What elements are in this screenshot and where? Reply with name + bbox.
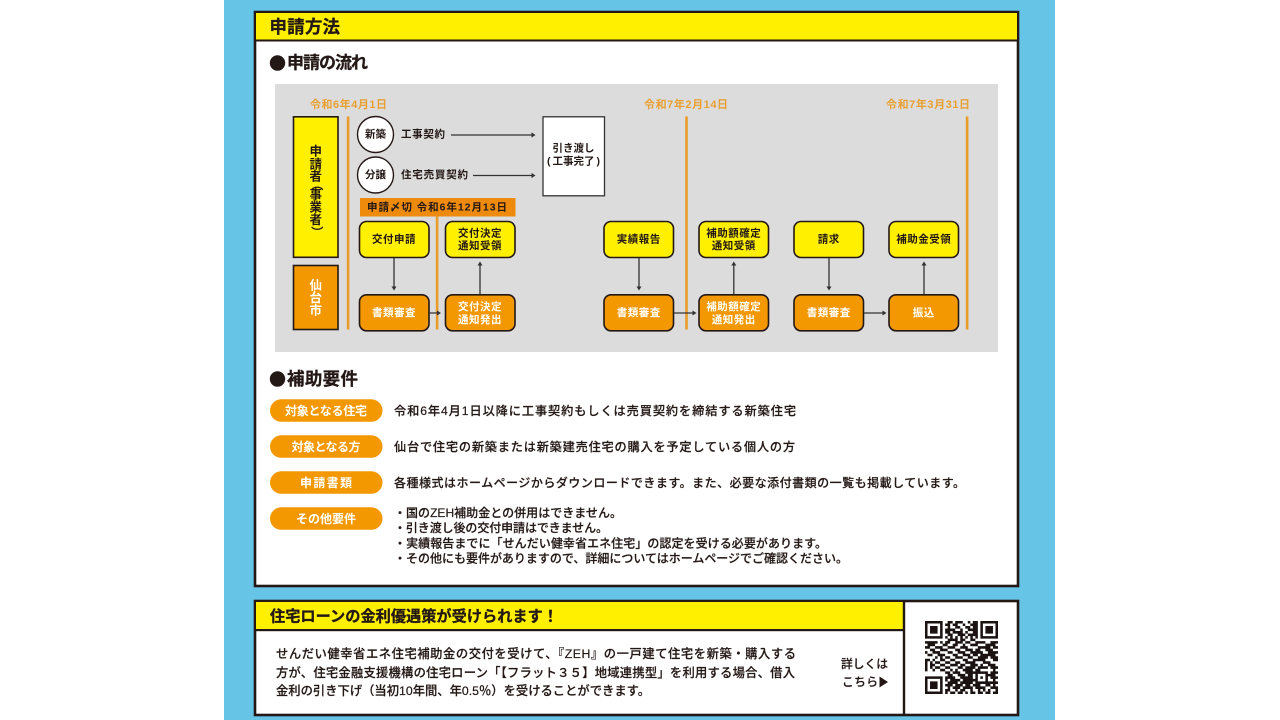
- heading: subsidy requirements: 補助要件: [287, 369, 358, 389]
- flow arrows: [392, 258, 926, 316]
- step: grant decision issued: 交付決定: [458, 300, 502, 313]
- requirement: other conditions: ・国のZEH補助金との併用はできません。: [394, 505, 622, 520]
- step: grant decision received: [446, 222, 515, 258]
- requirement: other conditions: [270, 505, 848, 566]
- step: grant decision issued: [446, 295, 515, 331]
- box: handover: 引き渡し: [552, 142, 594, 154]
- step: performance report: [604, 222, 674, 258]
- step: grant decision received: 交付決定: [458, 226, 502, 240]
- requirement: target housing: 令和6年4月1日以降に工事契約もしくは売買契約を締結する新築住宅: [394, 403, 796, 418]
- step: subsidy received: 補助金受領: [896, 232, 951, 246]
- panel: housing loan preferential rates: [255, 601, 1018, 715]
- deadline banner: [360, 198, 516, 216]
- step: bank transfer: [889, 295, 958, 331]
- date label: start: 令和6年4月1日: [310, 97, 387, 111]
- badge: subdivided sale: [358, 157, 394, 193]
- step: subsidy amount confirmed received: [699, 222, 768, 258]
- step: invoice: 請求: [818, 232, 840, 246]
- box: handover: (工事完了): [547, 154, 600, 168]
- lane: applicant: 者: [310, 168, 322, 184]
- requirement: other conditions: ・その他にも要件がありますので、詳細についてはホームページでご確認ください。: [394, 550, 848, 566]
- requirement: target housing: [270, 399, 796, 422]
- deadline banner: 申請〆切 令和6年12月13日: [367, 200, 507, 214]
- lane: applicant: ）: [309, 226, 323, 238]
- step: subsidy amount confirmed issued: [699, 295, 768, 331]
- label: construction contract: 工事契約: [401, 128, 445, 140]
- heading: application method: 申請方法: [270, 17, 340, 37]
- timeline line: start: [347, 116, 349, 330]
- loan description: 方が、住宅金融支援機構の住宅ローン「【フラット３５】地域連携型」を利用する場合、借入: [276, 665, 795, 680]
- step: grant application: 交付申請: [372, 232, 416, 246]
- step: grant decision received: 通知受領: [458, 239, 502, 252]
- step: grant application: [360, 222, 429, 258]
- link label: details here: [841, 657, 888, 689]
- blue page background: [224, 0, 1055, 720]
- step: subsidy received: [889, 222, 958, 258]
- step: document review 3: 書類審査: [807, 306, 851, 319]
- timeline line: report deadline: [685, 116, 688, 330]
- date label: report deadline: 令和7年2月14日: [644, 97, 728, 111]
- lane: applicant: 事: [310, 187, 323, 202]
- step: subsidy amount confirmed issued: 補助額確定: [706, 300, 761, 313]
- step: document review 2: 書類審査: [617, 306, 661, 319]
- loan description: 金利の引き下げ（当初10年間、年0.5％）を受けることができます。: [276, 683, 650, 698]
- loan description: せんだい健幸省エネ住宅補助金の交付を受けて、『ZEH』の一戸建て住宅を新築・購入する: [276, 646, 796, 661]
- lane: applicant: 者: [310, 212, 322, 227]
- QR code: [925, 621, 998, 694]
- label: sale contract: 住宅売買契約: [401, 168, 468, 181]
- requirement: target housing: 対象となる住宅: [285, 403, 367, 418]
- badge: new build: 新築: [365, 128, 386, 140]
- arrow: construction contract to handover: [451, 132, 536, 138]
- step: subsidy amount confirmed received: 通知受領: [712, 239, 756, 252]
- lane: applicant: 請: [310, 156, 323, 172]
- lane: Sendai city: [294, 266, 338, 330]
- loan description: [276, 646, 796, 698]
- requirement: target applicants: 仙台で住宅の新築または新築建売住宅の購入を予定している個人の方: [394, 439, 795, 454]
- step: grant decision issued: 通知発出: [458, 313, 502, 326]
- arrow: sale contract to handover: [473, 173, 536, 178]
- timeline line: application deadline: [436, 216, 438, 330]
- requirement: other conditions: ・実績報告までに「せんだい健幸省エネ住宅」の認定を受ける必要があります。: [394, 536, 827, 550]
- panel header band: [256, 13, 1017, 40]
- requirement: other conditions: ・引き渡し後の交付申請はできません。: [394, 520, 608, 535]
- box: handover: [543, 117, 604, 196]
- step: performance report: 実績報告: [617, 232, 661, 246]
- step: document review 1: [360, 295, 429, 331]
- loan panel header band: [256, 602, 903, 629]
- requirement: application documents: [270, 471, 965, 494]
- step: subsidy amount confirmed issued: 通知発出: [712, 313, 756, 326]
- step: bank transfer: 振込: [913, 306, 935, 319]
- step: invoice: [794, 222, 864, 258]
- requirement: application documents: 申請書類: [300, 475, 352, 490]
- link label: details here: こちら: [842, 675, 878, 689]
- lane: Sendai city: 台: [310, 290, 323, 305]
- requirement: target applicants: [270, 435, 795, 458]
- date label: final deadline: 令和7年3月31日: [886, 97, 970, 111]
- link label: details here: 詳しくは: [841, 657, 888, 671]
- step: document review 2: [604, 295, 674, 331]
- lane: applicant: 業: [310, 200, 323, 214]
- heading: application flow: 申請の流れ: [287, 52, 368, 72]
- step: document review 1: 書類審査: [372, 306, 416, 319]
- badge: new build: [358, 116, 394, 152]
- heading: loan: 住宅ローンの金利優遇策が受けられます！: [270, 608, 558, 626]
- lane: Sendai city: 市: [310, 302, 322, 318]
- panel: application method: [255, 12, 1018, 586]
- requirement: target applicants: 対象となる方: [292, 439, 360, 454]
- badge: subdivided sale: 分譲: [365, 168, 386, 181]
- lane: Sendai city: 仙: [310, 278, 322, 292]
- lane: applicant: 申: [310, 144, 322, 159]
- requirement: other conditions: その他要件: [296, 511, 356, 526]
- step: document review 3: [794, 295, 864, 331]
- step: subsidy amount confirmed received: 補助額確定: [706, 226, 761, 240]
- requirement: application documents: 各種様式はホームページからダウンロードできます。また、必要な添付書類の一覧も掲載しています。: [394, 475, 965, 490]
- lane: applicant: （: [309, 178, 323, 190]
- lane: applicant: [294, 117, 338, 257]
- flow chart panel: [275, 84, 998, 352]
- timeline line: final deadline: [966, 116, 968, 330]
